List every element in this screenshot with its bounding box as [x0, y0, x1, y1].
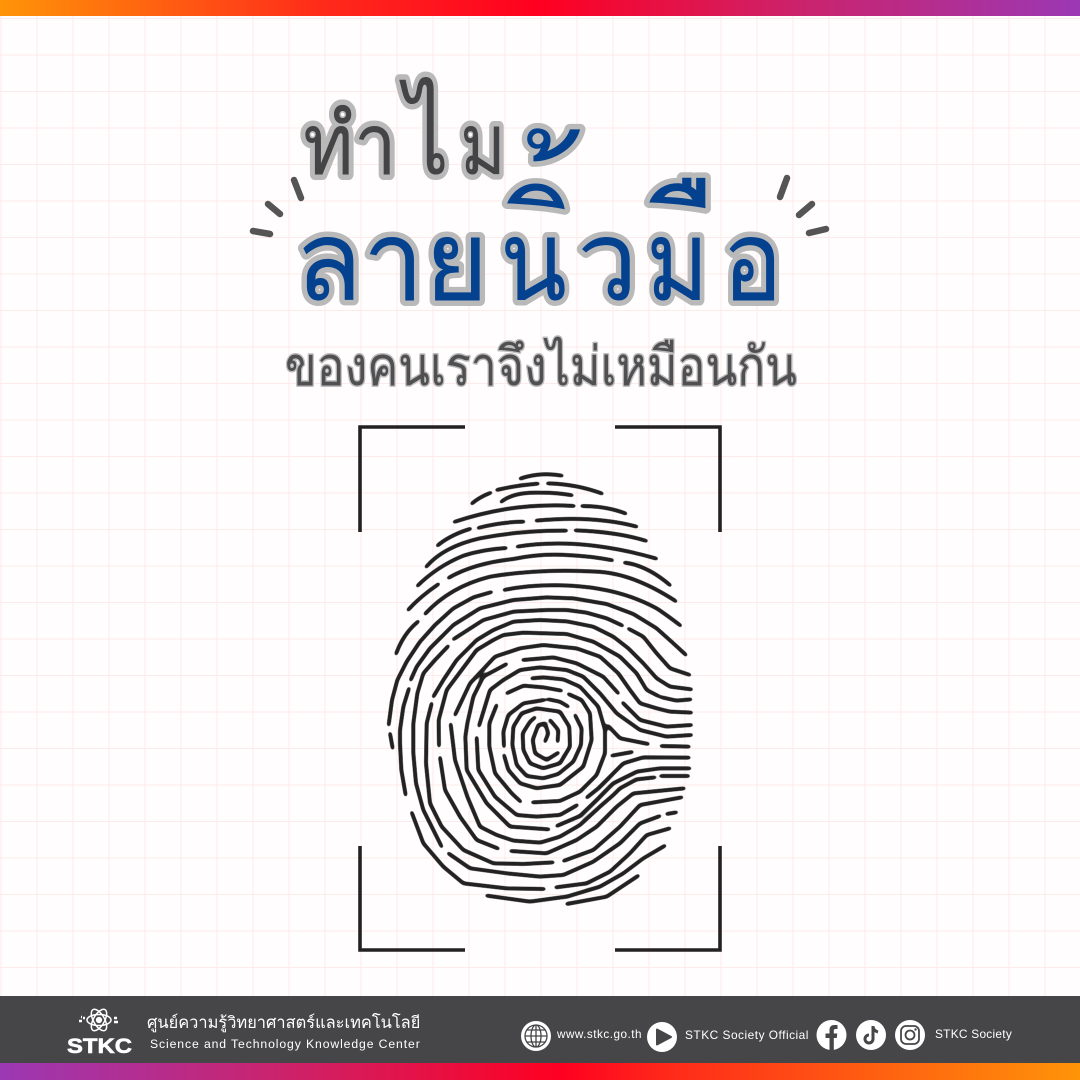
- website text: www.stkc.go.th: [557, 1028, 642, 1041]
- footer band: [0, 996, 1080, 1063]
- fingerprint core spiral: [503, 677, 605, 802]
- icon: globe: [521, 1021, 551, 1051]
- title line 2: อ: [722, 199, 783, 324]
- instagram text: STKC Society: [935, 1027, 1012, 1041]
- title line 1: ม: [460, 98, 506, 193]
- title line 2: ลาย: [295, 199, 489, 324]
- organisation name English: Science and Technology Knowledge Center: [150, 1037, 421, 1051]
- logo: STKC: [67, 1008, 132, 1058]
- title line 2: ว: [577, 199, 638, 324]
- title line 2: ม: [646, 199, 709, 324]
- title line 2: [295, 128, 783, 324]
- youtube text: STKC Society Official: [685, 1028, 809, 1042]
- fingerprint lower right ridges: [412, 697, 692, 904]
- sparkle strokes right: [780, 178, 826, 233]
- bottom gradient bar: [0, 1063, 1080, 1080]
- title line 1: ทำ: [303, 98, 397, 193]
- title line 1: [303, 76, 506, 197]
- icon: tiktok: [856, 1020, 886, 1050]
- fingerprint upper ridges: [396, 474, 681, 654]
- icon: instagram: [895, 1020, 925, 1050]
- title line 2: ื: [649, 171, 717, 310]
- icon: play: [647, 1022, 677, 1052]
- organisation name Thai: ศูนย์ความรู้วิทยาศาสตร์และเทคโนโลยี: [147, 1014, 420, 1032]
- title line 2: น: [500, 199, 567, 324]
- icon: facebook: [816, 1020, 846, 1050]
- logo atom icon: [79, 1007, 118, 1033]
- title line 2: ิ: [507, 172, 576, 311]
- subtitle: ของคนเราจึงไม่เหมือนกัน: [285, 336, 797, 397]
- title: [250, 72, 830, 397]
- sparkle strokes left: [253, 180, 301, 234]
- top gradient bar: [0, 0, 1080, 16]
- title line 2: ้: [526, 128, 580, 313]
- fingerprint long ridges: [389, 592, 692, 864]
- title line 1: ไ: [399, 76, 449, 197]
- logo wordmark: STKC: [67, 1035, 132, 1058]
